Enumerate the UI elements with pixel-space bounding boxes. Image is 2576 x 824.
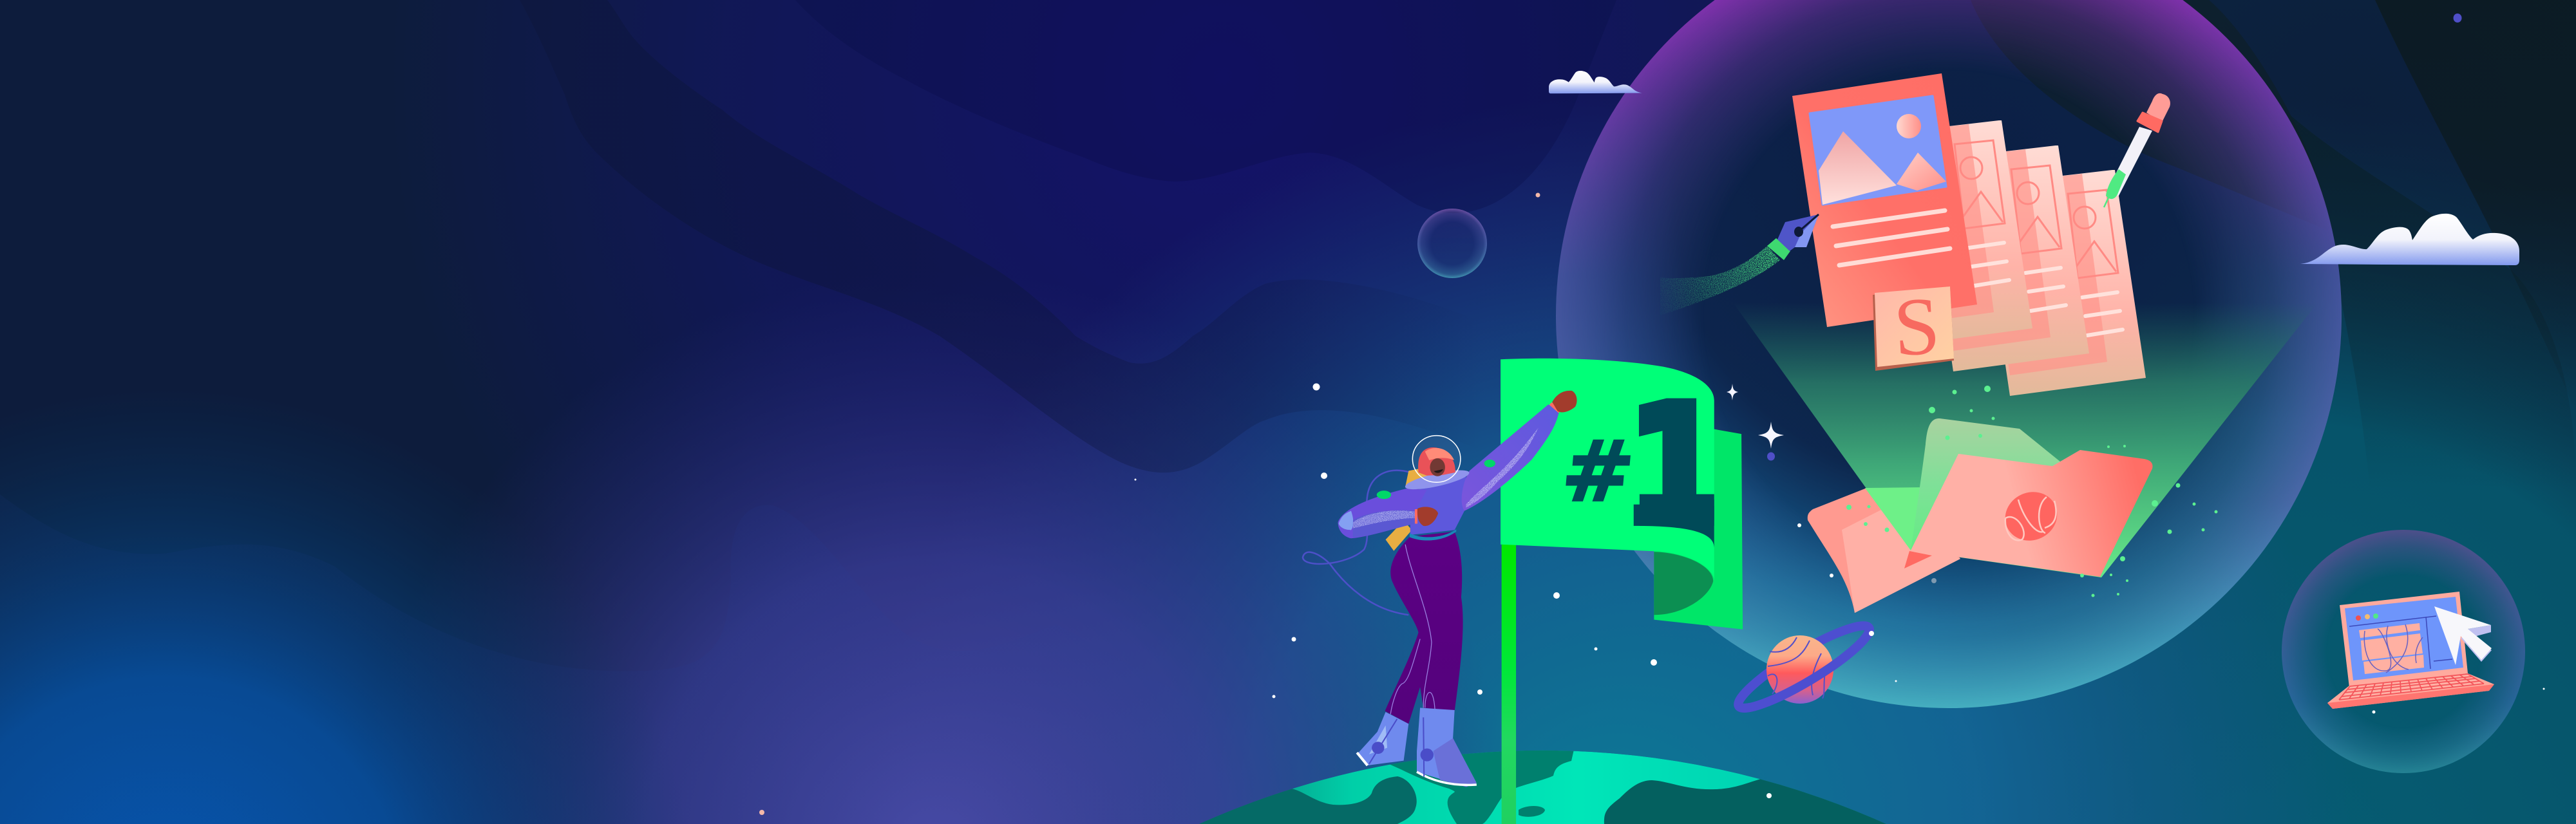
folder: front coral	[1911, 450, 2152, 577]
bubble rim glow	[1556, 0, 2342, 708]
white stars	[1135, 384, 2545, 798]
bubble inner shadow wedge	[1971, 0, 2331, 232]
sleeve stipple	[1353, 510, 1415, 529]
fist	[1551, 391, 1577, 413]
page 2	[1866, 120, 2032, 346]
green spotlight cone	[1733, 303, 2318, 577]
legs	[1385, 532, 1463, 724]
backpack	[1386, 469, 1443, 551]
globe	[1198, 744, 1887, 824]
big bubble	[1556, 0, 2342, 708]
globe logo on folder	[1997, 483, 2065, 549]
numeral 1: 1	[1628, 372, 1724, 558]
hand on chest	[1416, 507, 1438, 526]
pink stars	[759, 193, 1540, 815]
raised arm	[1462, 404, 1560, 511]
arm stipple	[1466, 427, 1539, 508]
bubble dark interior	[1556, 0, 2342, 708]
tether	[1303, 471, 1410, 615]
page 4	[1979, 170, 2146, 396]
continents	[1198, 744, 1887, 824]
laptop	[2327, 592, 2494, 709]
bubble rim	[2282, 530, 2525, 773]
flag pole	[1502, 545, 1516, 824]
helmet	[1412, 436, 1461, 482]
screen cards	[2359, 623, 2424, 674]
astronaut	[1303, 391, 1577, 787]
stack of layout pages	[1866, 120, 2146, 396]
text lines	[1833, 211, 1950, 265]
flag with #1	[1501, 359, 1743, 824]
collar	[1404, 466, 1471, 493]
cloud: small	[1549, 71, 1642, 93]
folded arm	[1338, 489, 1426, 538]
# sign: #	[1558, 423, 1638, 521]
blue stars	[1767, 14, 2461, 461]
green sparks	[1846, 386, 2218, 597]
serif letter tile	[1873, 279, 1954, 373]
head	[1418, 447, 1455, 476]
green spotlight over left folder	[1865, 487, 1922, 550]
flag face	[1501, 359, 1714, 581]
pen tool with trail	[1660, 214, 1819, 315]
serif letter tile: S	[1891, 279, 1942, 373]
numeral base wrap	[1634, 505, 1714, 548]
keyboard	[2327, 673, 2494, 709]
main page card	[1792, 73, 1977, 327]
torso	[1410, 476, 1466, 535]
folder group	[1808, 418, 2152, 613]
laptop bubble	[2282, 530, 2525, 773]
cursor arrow	[2434, 606, 2492, 665]
ringed planet	[1731, 615, 1877, 718]
picture frame	[1810, 96, 1946, 205]
leg seam lines	[1390, 545, 1435, 714]
cloud: large	[2300, 214, 2519, 265]
stars and sparkles	[759, 14, 2545, 815]
folder: back pale green	[1911, 418, 2060, 550]
arm patches	[1377, 460, 1495, 499]
color dropper	[2104, 93, 2170, 207]
curl shadow	[1654, 552, 1713, 615]
back flap	[1654, 429, 1743, 630]
sparkle: small	[1727, 384, 1738, 400]
boots	[1357, 707, 1477, 787]
folder: left pink	[1808, 488, 1960, 613]
belt	[1410, 529, 1456, 541]
page 3	[1922, 145, 2089, 371]
sparkle: large	[1758, 422, 1784, 449]
small empty bubble	[1417, 209, 1487, 278]
